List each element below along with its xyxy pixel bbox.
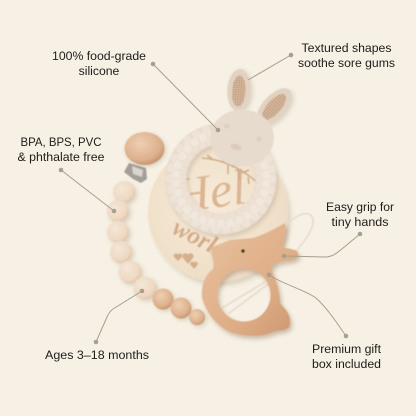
wooden milestone disc xyxy=(148,142,291,286)
silicone braided ring xyxy=(170,128,272,230)
label: gift box xyxy=(312,342,382,371)
label: gift box: box included xyxy=(312,357,381,371)
face xyxy=(210,110,274,166)
teether eye xyxy=(241,249,245,253)
ear shadows xyxy=(230,70,252,112)
pacifier clip chain xyxy=(107,132,207,327)
label: free from BPA xyxy=(18,135,105,164)
callout dots xyxy=(59,53,362,344)
label: textured shapes: soothe sore gums xyxy=(298,56,395,70)
label: gift box: Premium gift xyxy=(312,342,382,356)
silicone beads xyxy=(109,183,207,327)
label: ages: Ages 3–18 months xyxy=(45,348,149,362)
bunny head teether xyxy=(210,68,300,166)
wooden bunny teether xyxy=(202,223,301,339)
engraved text: world: worl xyxy=(168,214,221,259)
label: easy grip: Easy grip for xyxy=(326,200,394,214)
engraved leaf branch xyxy=(202,155,258,184)
engraved hearts xyxy=(174,253,198,269)
metal clip xyxy=(124,163,147,183)
label: food-grade silicone xyxy=(52,49,146,78)
label: textured shapes: Textured shapes xyxy=(302,41,392,55)
product group xyxy=(107,68,313,339)
engraved text: Hello: Hel xyxy=(169,158,249,224)
label: free from BPA: & phthalate free xyxy=(18,150,105,164)
label: textured shapes xyxy=(298,41,395,70)
label: easy grip: tiny hands xyxy=(332,215,388,229)
right ear xyxy=(250,82,298,132)
wooden clip head xyxy=(126,134,166,166)
label: food-grade silicone: silicone xyxy=(79,64,120,78)
wooden beads xyxy=(152,288,205,325)
label: food-grade silicone: 100% food-grade xyxy=(52,49,146,63)
callout lines xyxy=(61,55,360,342)
label: free from BPA: BPA, BPS, PVC xyxy=(20,135,102,149)
cotton cord xyxy=(222,214,313,314)
label: easy grip xyxy=(326,200,394,229)
left ear xyxy=(226,68,252,112)
